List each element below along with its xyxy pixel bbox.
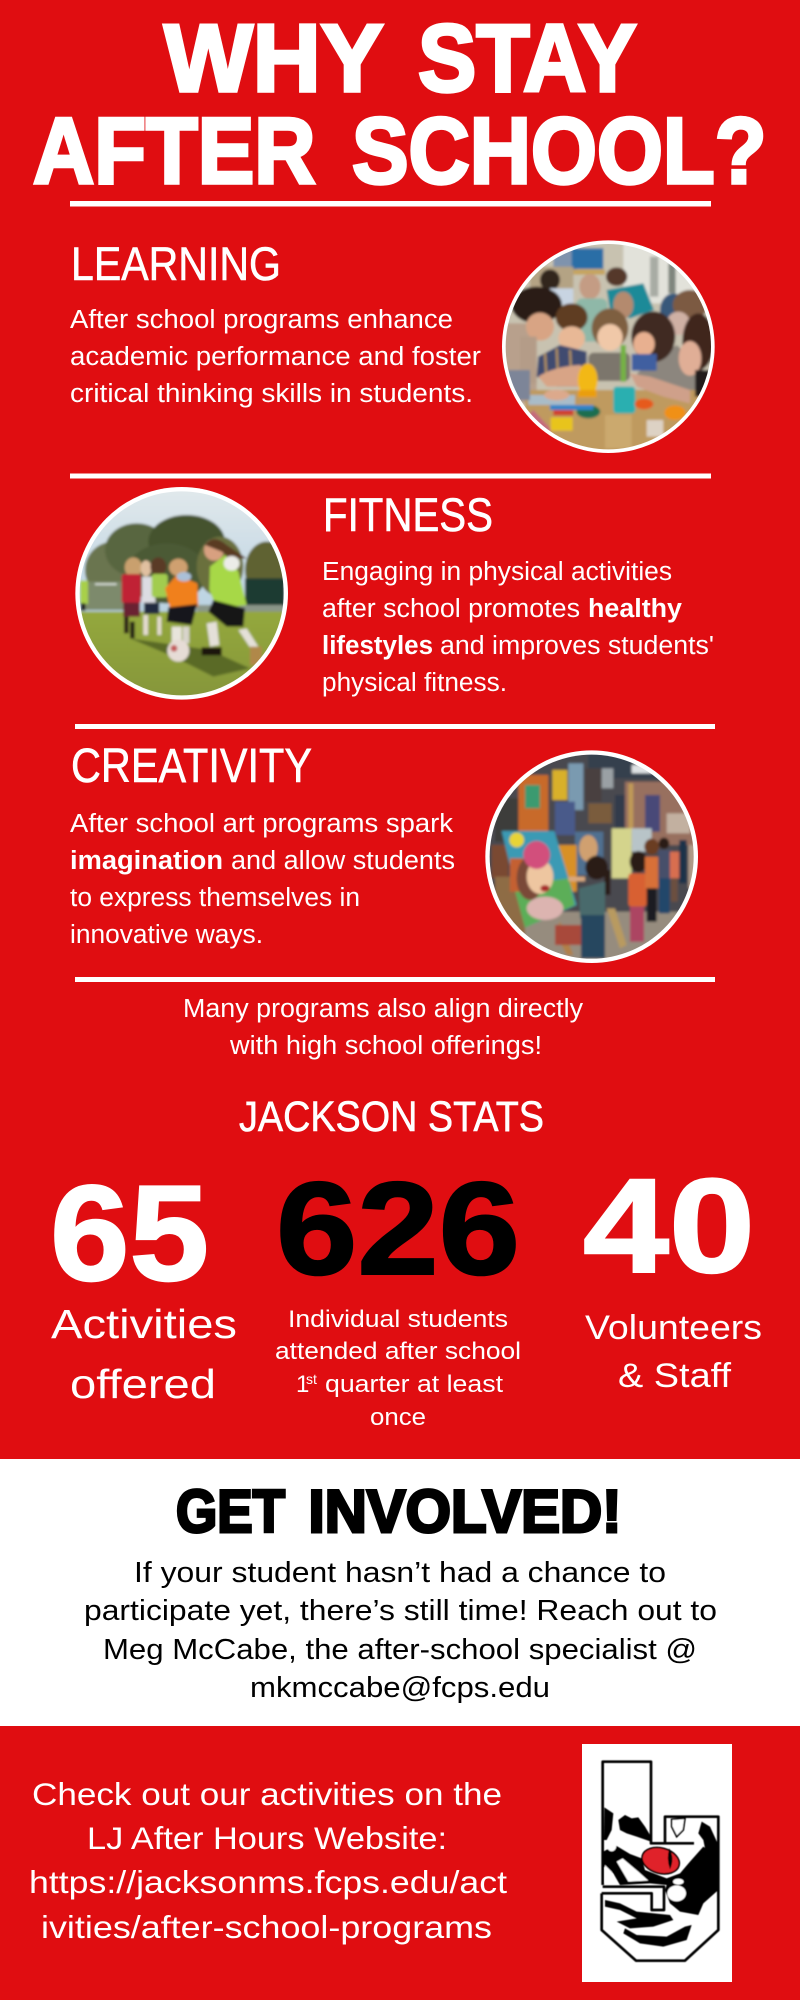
- text block: contact details: Meg McCabe, the after-school specialist @: [103, 1634, 697, 1666]
- heading: get involved: [176, 1478, 622, 1545]
- text block: high school alignment note: with high school offerings!: [229, 1032, 542, 1060]
- text block: fitness: [322, 558, 714, 697]
- text block: website: [29, 1776, 507, 1945]
- text block: website: LJ After Hours Website:: [87, 1820, 447, 1856]
- text block: learning: After school programs enhance: [70, 306, 453, 334]
- logo: LJ tiger eye: [582, 1744, 732, 1982]
- panel: get involved: [0, 1459, 800, 1726]
- divider: [75, 724, 715, 729]
- title: STAY: [418, 5, 636, 112]
- stat: 626 individual students: once: [370, 1404, 426, 1431]
- text block: fitness: healthy: [588, 595, 683, 623]
- text block: fitness: lifestyles: [322, 632, 433, 660]
- stat: 626 individual students: quarter at least: [325, 1371, 503, 1398]
- text block: learning: academic performance and foster: [70, 343, 482, 371]
- stat: 65 activities offered: [50, 1157, 237, 1407]
- stat: 626 individual students: 626: [276, 1155, 520, 1302]
- text block: contact details: participate yet, there’s still time! Reach out to: [84, 1595, 717, 1627]
- stat: 40 volunteers and staff: & Staff: [618, 1357, 732, 1395]
- stat: 65 activities offered: Activities: [51, 1301, 237, 1347]
- divider: [70, 201, 711, 206]
- title: SCHOOL?: [352, 98, 766, 203]
- text block: creativity: innovative ways.: [70, 921, 263, 949]
- divider: [70, 474, 711, 478]
- text block: creativity: and allow students: [231, 847, 455, 875]
- heading: learning: LEARNING: [71, 237, 281, 290]
- panel: fitness: [70, 480, 714, 708]
- text block: high school alignment note: [183, 995, 583, 1060]
- divider: [75, 977, 715, 982]
- text block: creativity: [70, 810, 455, 949]
- photo: children painting at easels: [485, 750, 698, 963]
- stat: 626 individual students: st: [306, 1371, 317, 1387]
- text block: learning: critical thinking skills in students.: [70, 380, 473, 408]
- stat: 40 volunteers and staff: [583, 1152, 762, 1395]
- text block: contact details: If your student hasn’t had a chance to: [134, 1557, 666, 1589]
- stat: 626 individual students: 1: [296, 1371, 309, 1398]
- photo: students doing science at table: [502, 240, 715, 453]
- text block: website: ivities/after-school-programs: [41, 1909, 492, 1945]
- panel: learning: [70, 230, 730, 460]
- stat: 626 individual students: attended after school: [275, 1338, 521, 1365]
- text block: contact details: mkmccabe@fcps.edu: [250, 1672, 550, 1704]
- text block: contact details: [84, 1557, 717, 1704]
- title: AFTER: [33, 98, 316, 203]
- title: WHY: [164, 5, 384, 112]
- text block: creativity: imagination: [70, 847, 223, 875]
- title: [33, 5, 766, 203]
- stat: 626 individual students: [275, 1155, 521, 1431]
- text block: high school alignment note: Many programs also align directly: [183, 995, 583, 1023]
- stat: 65 activities offered: offered: [70, 1361, 216, 1407]
- text block: creativity: to express themselves in: [70, 884, 360, 912]
- stat: 626 individual students: Individual students: [288, 1306, 508, 1333]
- stat: 40 volunteers and staff: Volunteers: [585, 1309, 762, 1347]
- text block: creativity: After school art programs spark: [70, 810, 453, 838]
- heading: get involved: INVOLVED!: [308, 1478, 622, 1545]
- text block: fitness: after school promotes: [322, 595, 580, 623]
- text block: website: https://jacksonms.fcps.edu/act: [29, 1864, 507, 1900]
- heading: creativity: CREATIVITY: [71, 740, 312, 793]
- text block: learning: [70, 306, 482, 408]
- text block: fitness: and improves students': [440, 632, 714, 660]
- stat: 40 volunteers and staff: 40: [583, 1152, 755, 1301]
- heading: fitness: FITNESS: [323, 488, 493, 541]
- text block: fitness: Engaging in physical activities: [322, 558, 672, 586]
- text block: fitness: physical fitness.: [322, 669, 507, 697]
- panel: creativity: [70, 740, 705, 975]
- text block: website: Check out our activities on the: [32, 1776, 502, 1812]
- heading: get involved: GET: [176, 1478, 285, 1545]
- photo: girls playing soccer: [75, 487, 288, 700]
- heading: jackson stats: JACKSON STATS: [239, 1093, 544, 1141]
- stat: 65 activities offered: 65: [50, 1157, 209, 1309]
